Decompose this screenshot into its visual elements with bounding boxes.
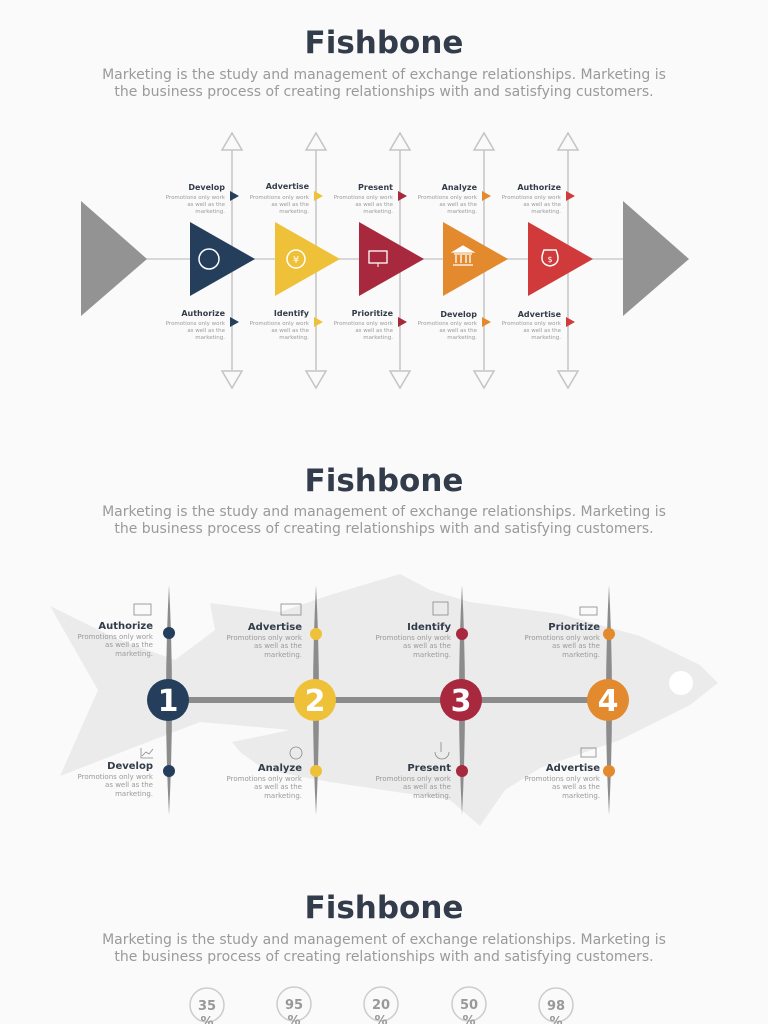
diagram 2: fish: marketing. (115, 650, 153, 658)
diagram 2: fish: marketing. (413, 651, 451, 659)
labels top (166, 182, 562, 341)
labels top: marketing. (531, 335, 561, 341)
labels top: Analyze (442, 183, 478, 192)
labels top: as well as the (523, 202, 562, 208)
subtitle 3: the business process of creating relationships with and satisfying customers. (114, 949, 654, 965)
labels top: marketing. (363, 209, 393, 215)
diagram 2: fish: marketing. (562, 792, 600, 800)
labels top: marketing. (531, 209, 561, 215)
diagram 2: fish: as well as the (552, 642, 600, 650)
labels top: Authorize (517, 183, 562, 192)
percentage circles: 50 (460, 998, 478, 1013)
diagram 2: fish (50, 574, 718, 826)
diagram 2: fish: Promotions only work (227, 775, 303, 783)
step triangles (190, 222, 593, 296)
labels top: Promotions only work (502, 321, 562, 327)
diagram 2: fish: Promotions only work (525, 634, 601, 642)
diagram 2: fish: as well as the (105, 781, 153, 789)
diagram 2: fish: Promotions only work (227, 634, 303, 642)
subtitle 1: the business process of creating relationships with and satisfying customers. (114, 84, 654, 100)
diagram 2: fish: Prioritize (548, 622, 600, 633)
labels top: Advertise (266, 182, 310, 191)
diagram 2: fish: Advertise (546, 763, 600, 774)
labels top: marketing. (447, 209, 477, 215)
labels top: marketing. (447, 335, 477, 341)
diagram 2: fish: Promotions only work (525, 775, 601, 783)
labels top: as well as the (523, 328, 562, 334)
labels top: as well as the (355, 202, 394, 208)
labels top: as well as the (439, 328, 478, 334)
labels top: as well as the (271, 202, 310, 208)
labels top: Promotions only work (166, 195, 226, 201)
icon: right gray triangle (623, 201, 689, 316)
small markers (230, 191, 575, 327)
diagram 2: fish: Present (407, 763, 451, 774)
percentage circles: 95 (285, 998, 303, 1013)
diagram 2: fish: as well as the (403, 642, 451, 650)
diagram 2: fish: as well as the (105, 641, 153, 649)
labels top: marketing. (279, 209, 309, 215)
diagram 2: fish: as well as the (254, 642, 302, 650)
labels top: Promotions only work (166, 321, 226, 327)
diagram 2: fish: Develop (107, 761, 153, 772)
fish silhouette (50, 574, 718, 826)
diagram 2: fish: marketing. (115, 790, 153, 798)
diagram 2: fish: marketing. (413, 792, 451, 800)
subtitle 3: Marketing is the study and management of exchange relationships. Marketing is (102, 932, 666, 948)
labels top: as well as the (271, 328, 310, 334)
labels top: as well as the (187, 328, 226, 334)
diagram 2: fish: Promotions only work (78, 633, 154, 641)
diagram 2: fish: Promotions only work (376, 775, 452, 783)
labels top: Present (358, 183, 393, 192)
diagram 2: fish: as well as the (403, 783, 451, 791)
diagram 2: fish: marketing. (264, 651, 302, 659)
labels top: as well as the (355, 328, 394, 334)
percentage circles: 20 (372, 998, 390, 1013)
subtitle 1: Marketing is the study and management of exchange relationships. Marketing is (102, 67, 666, 83)
diagram 2: fish: marketing. (264, 792, 302, 800)
title 1: Fishbone (305, 25, 463, 61)
labels top: marketing. (363, 335, 393, 341)
diagram 2: fish: Identify (407, 622, 451, 633)
title 2: Fishbone (305, 463, 463, 499)
title 3: Fishbone (305, 890, 463, 926)
diagram 2: fish: marketing. (562, 651, 600, 659)
diagram 2: fish: Advertise (248, 622, 302, 633)
percentage circles: 35 (198, 999, 216, 1014)
step triangles: $ (547, 255, 553, 264)
diagram 2: fish: 3 (451, 684, 471, 719)
percentage circles (190, 987, 573, 1024)
labels top: Identify (274, 309, 310, 318)
diagram 2: fish: Analyze (258, 763, 302, 774)
labels top: Promotions only work (418, 195, 478, 201)
labels top: marketing. (279, 335, 309, 341)
percentage circles: 98 (547, 999, 565, 1014)
labels top: Promotions only work (502, 195, 562, 201)
labels top: Develop (440, 310, 477, 319)
labels top: marketing. (195, 335, 225, 341)
diagram 2: fish: 1 (158, 684, 178, 719)
labels top: Authorize (181, 309, 226, 318)
subtitle 1 (102, 67, 666, 100)
diagram 2: fish: Authorize (98, 621, 153, 632)
subtitle 2: the business process of creating relationships with and satisfying customers. (114, 521, 654, 537)
diagram 2: fish: as well as the (254, 783, 302, 791)
icon: left gray triangle (81, 201, 147, 316)
labels top: Promotions only work (250, 321, 310, 327)
diagram 2: fish: 4 (598, 684, 618, 719)
diagram 2: fish: Promotions only work (78, 773, 154, 781)
step triangles: ¥ (293, 255, 299, 266)
labels top: Develop (188, 183, 225, 192)
diagram 1: triangle fishbone (81, 133, 689, 388)
diagram 2: fish: Promotions only work (376, 634, 452, 642)
labels top: Advertise (518, 310, 562, 319)
diagram 2: fish: 2 (305, 684, 325, 719)
diagram 2: fish: as well as the (552, 783, 600, 791)
labels top: Promotions only work (418, 321, 478, 327)
subtitle 3 (102, 932, 666, 965)
labels top: marketing. (195, 209, 225, 215)
labels top: Promotions only work (250, 195, 310, 201)
labels top: as well as the (187, 202, 226, 208)
labels top: Promotions only work (334, 321, 394, 327)
labels top: Promotions only work (334, 195, 394, 201)
subtitle 2 (102, 504, 666, 537)
labels top: as well as the (439, 202, 478, 208)
subtitle 2: Marketing is the study and management of exchange relationships. Marketing is (102, 504, 666, 520)
labels top: Prioritize (352, 309, 394, 318)
